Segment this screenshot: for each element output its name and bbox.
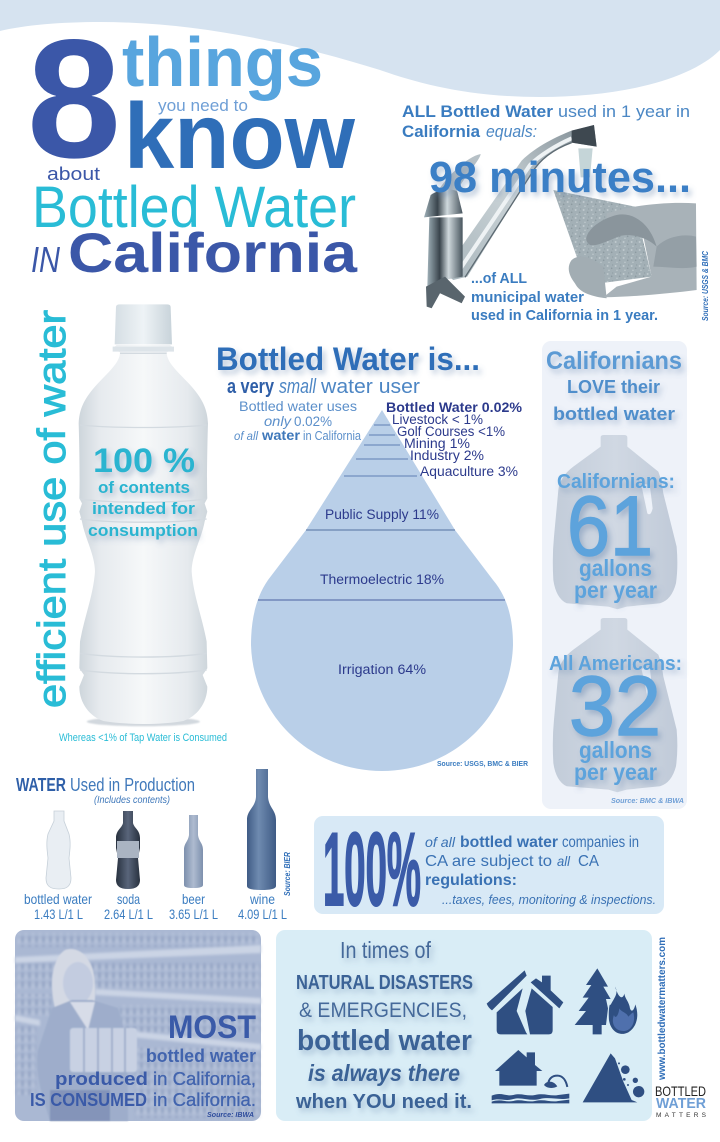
panel: californians love bottled water — [542, 341, 687, 809]
text: in times of natural disasters: is always there — [308, 1060, 460, 1086]
source: Source: BIER — [283, 852, 292, 896]
heading: bottled water is — [216, 341, 480, 398]
title: 8 — [27, 4, 121, 193]
labels: 1.43 L/1 L — [34, 906, 83, 922]
heading: water used in production — [16, 775, 195, 806]
labels: 3.65 L/1 L — [169, 906, 218, 922]
chart: water drop: Bottled Water 0.02% — [386, 400, 522, 415]
text: in times of natural disasters — [295, 937, 473, 1113]
text: regulations: bottled water — [460, 834, 558, 851]
icon: faucet and hand with glass — [424, 125, 697, 308]
title: you need to — [158, 96, 248, 115]
text: all bottled water: ALL Bottled Water — [402, 102, 553, 121]
title: about — [47, 164, 100, 184]
chart: bottles comparison — [24, 769, 292, 922]
text: in times of natural disasters: & EMERGENCIES, — [299, 999, 467, 1022]
text: regulations: regulations: — [425, 872, 517, 889]
source: Source: BMC & IBWA — [611, 796, 684, 805]
chart: water drop: Source: USGS, BMC & BIER — [437, 759, 529, 768]
text: all bottled water: used in 1 year in — [558, 102, 690, 121]
panel: most bottled water photo — [15, 930, 261, 1121]
source: Source: USGS & BMC — [701, 251, 710, 321]
heading: bottled water is: small — [279, 376, 316, 398]
title — [27, 4, 358, 284]
heading: californians — [546, 347, 682, 424]
icon: rockslide — [583, 1053, 644, 1102]
panel: 100 percent regulations: 100% — [323, 812, 421, 928]
text: bottled water uses: only — [264, 413, 292, 429]
big number: 98 minutes: 98 minutes... — [429, 153, 691, 202]
text: regulations: all — [557, 853, 571, 869]
text: regulations: CA — [578, 853, 599, 870]
text: in times of natural disasters: NATURAL DISASTERS — [296, 972, 473, 994]
icon: plastic water bottle — [46, 811, 71, 889]
chart: water drop: Livestock < 1% — [392, 412, 483, 427]
text: 100 percent of contents: consumption — [88, 521, 198, 540]
shelves — [15, 933, 261, 1118]
icon: wine bottle — [247, 769, 276, 890]
chart: water drop — [251, 400, 529, 771]
logo: bottled water matters: WATER — [656, 1095, 706, 1112]
heading: water used in production: (Includes contents) — [94, 795, 170, 806]
stat: californians 61 gallons: gallons — [579, 555, 652, 581]
text: bottled water uses: water — [261, 427, 301, 443]
text: most — [30, 1009, 256, 1119]
text: all bottled water: equals: — [486, 122, 537, 141]
text: of all municipal water: ...of ALL — [471, 270, 527, 287]
text: 100 percent of contents: of contents — [98, 478, 190, 497]
labels: 4.09 L/1 L — [238, 906, 287, 922]
heading: water used in production: Used in Production — [70, 775, 195, 795]
title: know — [124, 84, 356, 188]
vertical heading: efficient use of water: efficient use of water — [31, 310, 74, 708]
title: things — [122, 23, 323, 101]
text: all bottled water: California — [402, 122, 481, 141]
text: most: IS CONSUMED — [30, 1090, 147, 1110]
logo: bottled water matters: MATTERS — [656, 1112, 707, 1119]
text: 100 percent of contents: 100 % — [93, 442, 195, 480]
photo: woman holding bottles — [37, 949, 137, 1121]
title: IN — [31, 239, 61, 280]
heading: bottled water is: water user — [320, 376, 420, 398]
logo: bottled water matters — [655, 1083, 707, 1119]
text: of all municipal water: municipal water — [471, 289, 584, 306]
icon: jug one — [553, 435, 677, 609]
text: bottled water uses: Bottled water uses — [239, 398, 357, 414]
icon: earthquake house — [487, 970, 563, 1034]
labels: beer — [182, 891, 205, 907]
icons: disasters — [487, 968, 644, 1103]
panel: natural disasters — [276, 930, 652, 1121]
stat: all americans 32 gallons: per year — [574, 759, 657, 785]
chart: water drop: Thermoelectric 18% — [320, 572, 444, 587]
text: most: produced — [55, 1069, 148, 1089]
text: bottled water uses — [234, 398, 362, 443]
text: regulations: ...taxes, fees, monitoring & inspections. — [442, 892, 656, 907]
stat: californians 61 gallons — [557, 471, 675, 603]
faucet and glass section — [402, 102, 710, 324]
chart: water drop: Industry 2% — [410, 448, 484, 463]
stat: all americans 32 gallons: 32 — [569, 659, 661, 753]
stat: all americans 32 gallons: All Americans: — [549, 653, 682, 675]
labels: bottled water — [24, 891, 92, 907]
text: bottled water uses: of all — [234, 429, 258, 443]
stat: californians 61 gallons: 61 — [567, 479, 653, 573]
heading: californians: Californians — [546, 347, 682, 375]
website url: www.bottledwatermatters.com — [656, 937, 668, 1081]
text: of all municipal water — [471, 270, 658, 324]
text: in times of natural disasters: bottled water — [297, 1025, 472, 1057]
icon: beer bottle — [184, 815, 203, 888]
chart: water drop: Public Supply 11% — [325, 507, 439, 522]
text: most: bottled water — [146, 1046, 256, 1066]
icon: soda bottle — [116, 811, 140, 889]
text: regulations: CA are subject to — [425, 853, 552, 870]
text: in times of natural disasters: In times of — [340, 937, 432, 963]
icon: soda label — [117, 841, 139, 858]
labels: 2.64 L/1 L — [104, 906, 153, 922]
heading: californians: LOVE their — [567, 377, 660, 397]
text: bottled water uses: 0.02% — [294, 413, 332, 429]
stat: all americans 32 gallons: gallons — [579, 737, 652, 763]
text: in times of natural disasters: when YOU need it. — [295, 1091, 472, 1113]
text: most: Source: IBWA — [207, 1112, 254, 1119]
chart: water drop: Golf Courses <1% — [397, 424, 505, 439]
text: regulations: companies in — [562, 834, 639, 851]
chart: water drop: Mining 1% — [404, 436, 470, 451]
heading: water used in production: WATER — [16, 775, 66, 795]
title: California — [68, 221, 358, 284]
icon: flooded house — [492, 1050, 569, 1103]
stat: californians 61 gallons: per year — [574, 577, 657, 603]
text: most: in California. — [153, 1090, 256, 1110]
text: 100 percent of contents: intended for — [92, 499, 195, 518]
text: of all municipal water: used in California in 1 year. — [471, 307, 658, 324]
icon: jug two — [553, 618, 677, 792]
title: Bottled Water — [32, 175, 356, 240]
heading: bottled water is: a very — [227, 376, 275, 398]
heading: bottled water is: Bottled Water is... — [216, 341, 480, 377]
chart: water drop: Irrigation 64% — [338, 662, 426, 677]
labels: wine — [249, 891, 275, 907]
text: regulations: of all — [425, 834, 456, 850]
text: most: in California, — [153, 1069, 256, 1089]
text: bottled water uses: in California — [303, 428, 362, 443]
text: 100 percent of contents — [88, 442, 198, 540]
chart: water drop: Aquaculture 3% — [420, 464, 518, 479]
text: most: MOST — [168, 1009, 256, 1045]
caption: tap water: Whereas <1% of Tap Water is Consumed — [59, 732, 227, 744]
text: regulations — [425, 834, 656, 907]
labels — [24, 891, 287, 922]
logo: bottled water matters: BOTTLED — [655, 1083, 706, 1099]
heading: californians: bottled water — [553, 404, 675, 424]
text: all bottled water — [402, 102, 690, 141]
stat: californians 61 gallons: Californians: — [557, 471, 675, 493]
icon: tree on fire — [575, 968, 637, 1034]
labels: soda — [117, 891, 140, 907]
bottle panel — [79, 304, 208, 726]
background wave — [0, 0, 720, 97]
stat: all americans 32 gallons — [549, 653, 682, 785]
icon: water bottle — [79, 304, 208, 726]
